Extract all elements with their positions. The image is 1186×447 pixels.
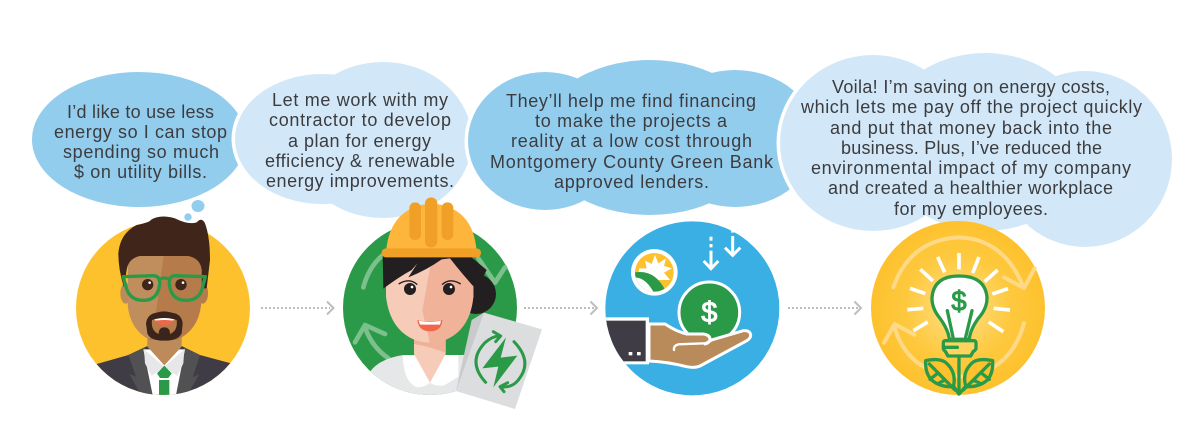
bubble 3 text: reality at a low cost through: [511, 131, 752, 151]
speech bubble 1: [32, 72, 246, 207]
suit and shirt: [96, 338, 230, 395]
arrow 3: [788, 302, 861, 314]
light rays: [907, 253, 1010, 332]
beard and mouth: [146, 311, 183, 341]
eyes: [142, 279, 187, 290]
dollar sign: $: [951, 285, 967, 316]
hair: [118, 217, 210, 288]
bubble 3 text: [490, 91, 774, 192]
hard hat: [382, 197, 481, 257]
bubble 4 text: Voila! I’m saving on energy costs,: [832, 77, 1110, 97]
speech bubble 4: [780, 53, 1172, 247]
icon: hand holding dollar coin: [603, 221, 779, 395]
icon: business owner with glasses: [76, 217, 250, 400]
bubble 4 text: [800, 77, 1142, 219]
infographic: four step energy story: [32, 53, 1172, 409]
bubble 1 text: I’d like to use less: [67, 102, 214, 122]
down arrows: [704, 229, 740, 269]
bubble 3 text: approved lenders.: [554, 172, 709, 192]
ears: [120, 283, 131, 304]
face: [128, 256, 202, 340]
bubble 4 text: and put that money back into the: [830, 118, 1112, 138]
leaves and stem: [926, 356, 993, 394]
bubble 2 text: efficiency & renewable: [265, 151, 455, 171]
cycle arrows: [884, 237, 1035, 377]
icon: contractor in hard hat: [343, 197, 542, 409]
icon: light bulb plant: [871, 221, 1045, 395]
bubble 1 text: $ on utility bills.: [74, 162, 207, 182]
bubble 1 text: energy so I can stop: [54, 122, 227, 142]
bubble 2 text: a plan for energy: [288, 131, 431, 151]
blouse: [370, 355, 464, 395]
bubble 3 text: Montgomery County Green Bank: [490, 152, 774, 172]
thought dots: [184, 200, 204, 221]
bubble 4 text: and created a healthier workplace: [828, 178, 1113, 198]
cuff: [603, 317, 649, 364]
bubble 2 text: energy improvements.: [266, 171, 454, 191]
hair bun: [456, 274, 496, 314]
dollar coin: [679, 282, 740, 343]
bubble 4 text: business. Plus, I’ve reduced the: [841, 138, 1102, 158]
bubble 2 text: [265, 90, 455, 191]
recycling arrows: [355, 253, 505, 358]
hand: [649, 324, 751, 367]
green bank logo: [631, 249, 678, 296]
hair: [383, 256, 487, 290]
arrow 1: [261, 302, 334, 314]
bubble 4 text: environmental impact of my company: [811, 158, 1131, 178]
eyes: [399, 281, 461, 295]
document with energy icon: [456, 313, 542, 409]
face: [386, 258, 473, 342]
arrow 2: [524, 302, 597, 314]
bulb: [932, 276, 987, 356]
neck: [414, 337, 446, 383]
bubble 1 text: [54, 102, 227, 182]
bubble 3 text: They’ll help me find financing: [506, 91, 756, 111]
bubble 4 text: which lets me pay off the project quickly: [800, 97, 1142, 117]
bubble 1 text: spending so much: [63, 142, 219, 162]
dollar coin: $: [701, 297, 717, 329]
glasses: [123, 276, 205, 300]
speech bubble 3: [468, 60, 817, 215]
bubble 4 text: for my employees.: [894, 199, 1048, 219]
bubble 3 text: to make the projects a: [535, 111, 728, 131]
mouth: [417, 320, 442, 331]
speech bubble 2: [235, 62, 472, 218]
bubble 2 text: Let me work with my: [272, 90, 448, 110]
bubble 2 text: contractor to develop: [269, 110, 451, 130]
